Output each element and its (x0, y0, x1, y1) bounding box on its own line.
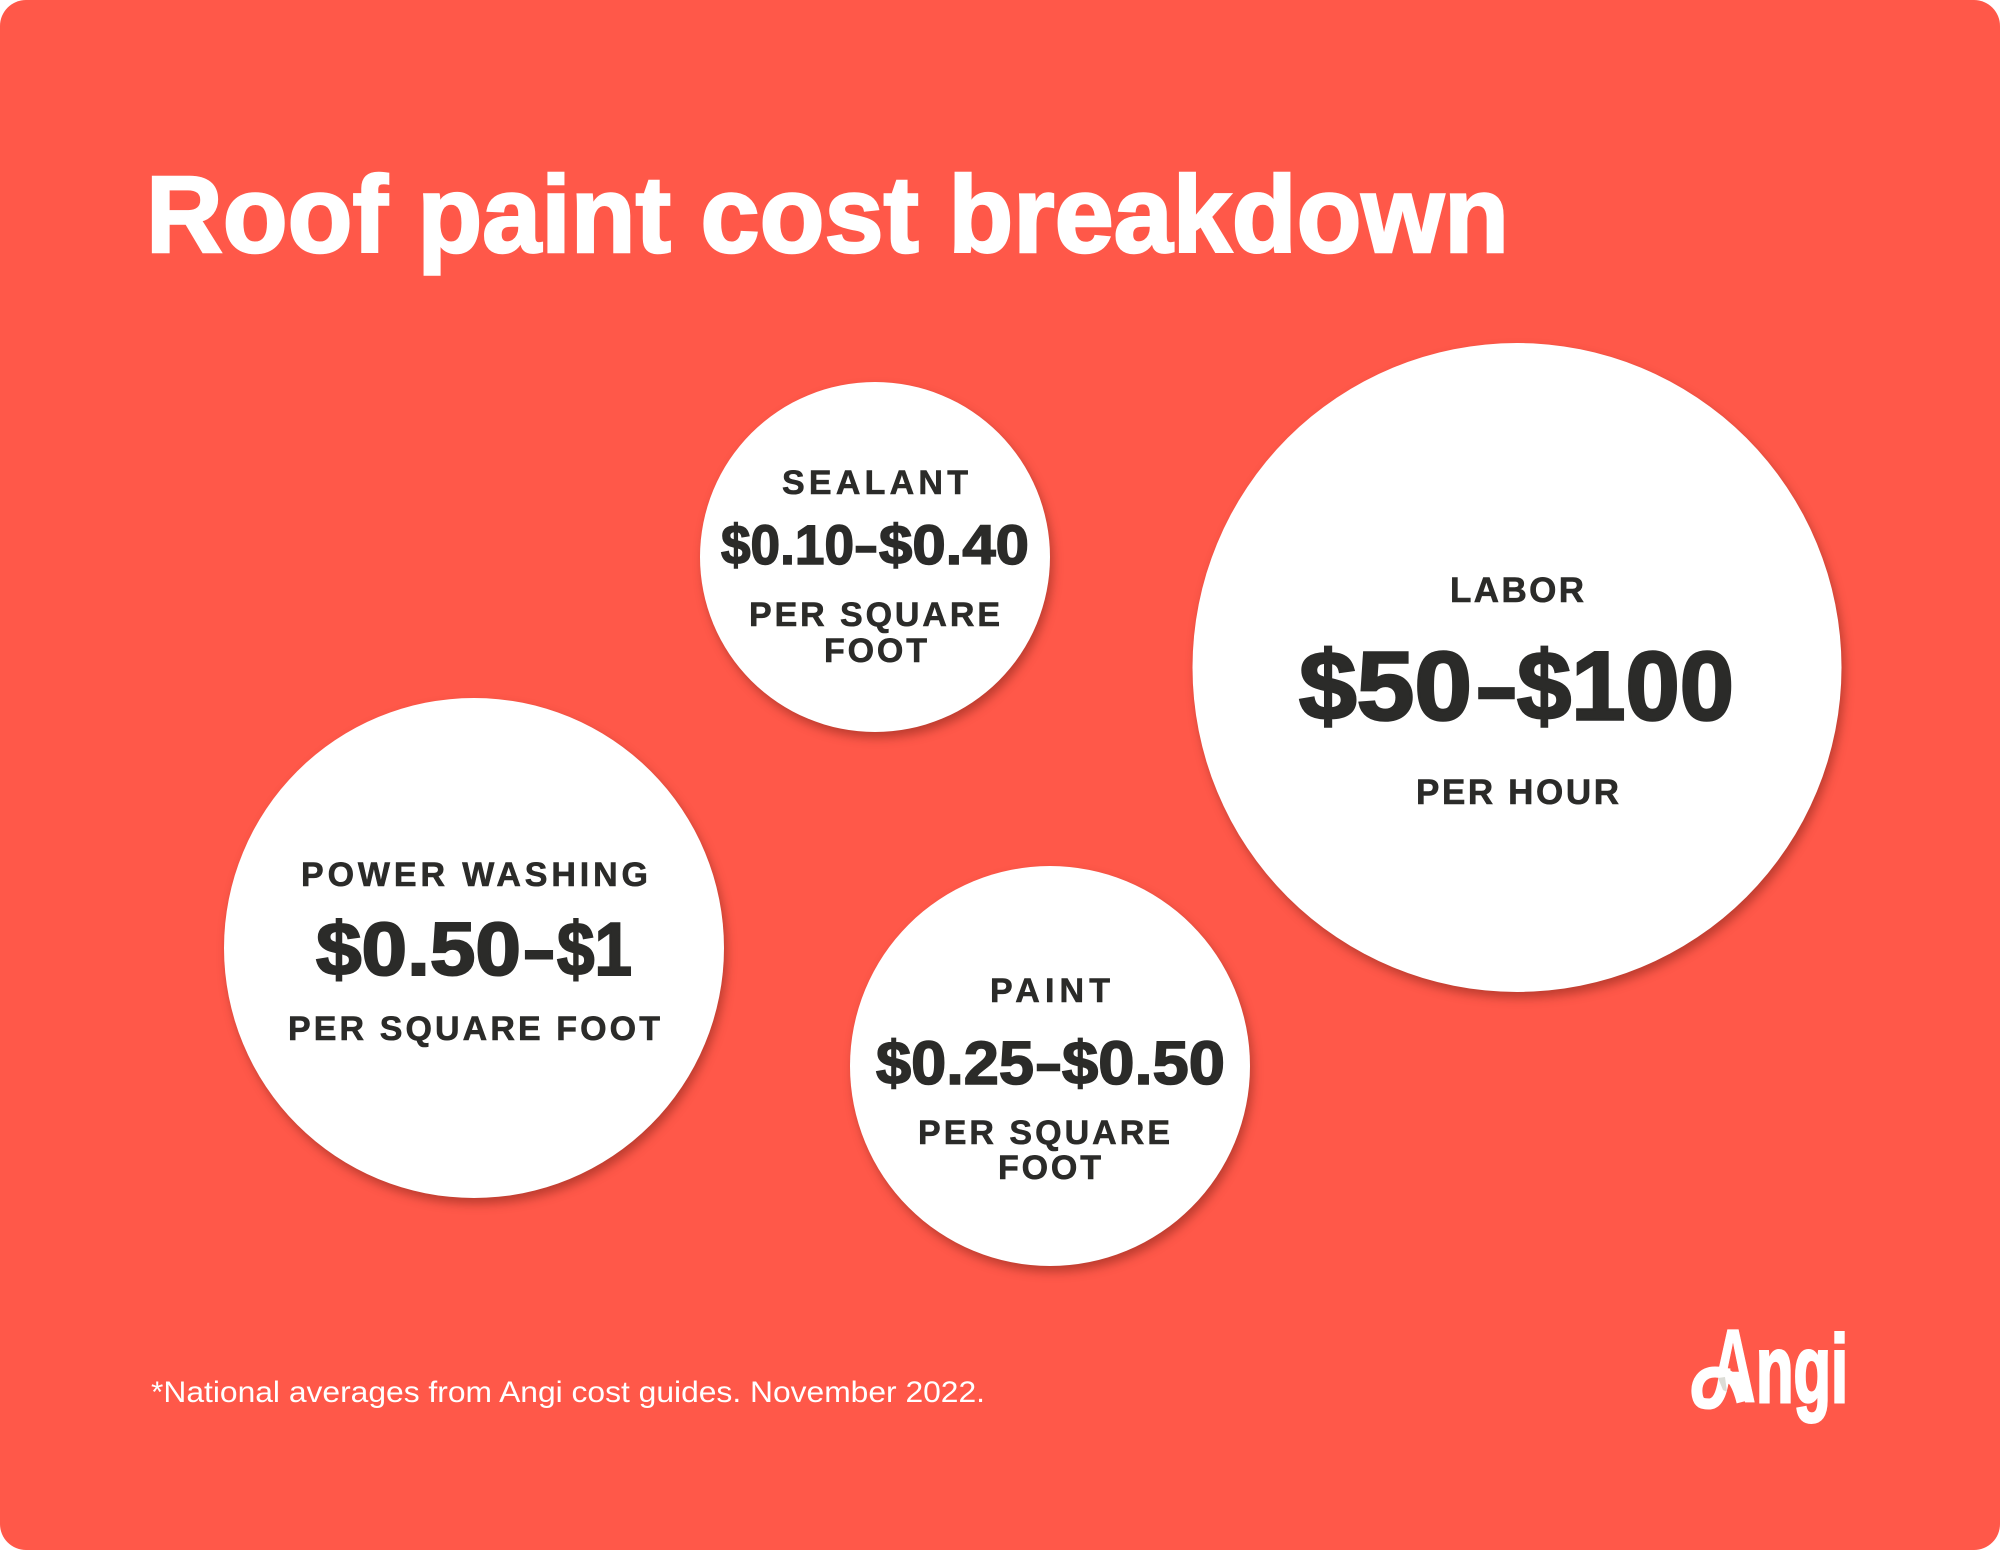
labor price: $100 (1517, 632, 1734, 740)
panel: paint cost circle (850, 866, 1250, 1266)
icon: Angi logo: A (1710, 1308, 1756, 1425)
power washing unit: PER SQUARE FOOT (288, 1010, 660, 1048)
labor price: – (1477, 632, 1516, 740)
paint price (876, 1029, 1225, 1097)
power washing price: $0.50 (316, 907, 521, 991)
power washing label: POWER WASHING (301, 856, 648, 894)
sealant unit second line: FOOT (824, 632, 927, 670)
sealant price: $0.10 (721, 513, 854, 576)
panel: labor cost circle (1192, 343, 1842, 992)
paint price: $0.50 (1062, 1029, 1225, 1097)
sealant label: SEALANT (782, 464, 968, 502)
labor price (1299, 632, 1734, 740)
paint unit: PER SQUARE (918, 1114, 1170, 1152)
icon: Angi logo (1691, 1329, 1845, 1424)
sealant price (721, 513, 1029, 576)
sealant price: – (855, 513, 877, 576)
paint price: $0.25 (876, 1029, 1034, 1097)
labor unit: PER HOUR (1416, 773, 1619, 812)
labor price: $50 (1299, 632, 1472, 740)
panel: sealant cost circle (700, 382, 1050, 732)
power washing price: – (524, 907, 554, 991)
paint label: PAINT (990, 972, 1110, 1010)
paint unit second line: FOOT (998, 1149, 1101, 1187)
title: Roof paint cost breakdown (146, 154, 1509, 276)
footnote: *National averages from Angi cost guides. November 2022. (151, 1376, 985, 1409)
icon: Angi logo: ngi (1756, 1316, 1848, 1423)
sealant price: $0.40 (879, 513, 1029, 576)
panel: power washing cost circle (224, 698, 724, 1198)
labor label: LABOR (1450, 571, 1584, 610)
power washing price (316, 907, 632, 991)
power washing price: $1 (557, 907, 632, 991)
paint price: – (1036, 1029, 1061, 1097)
sealant unit: PER SQUARE (749, 596, 1000, 634)
